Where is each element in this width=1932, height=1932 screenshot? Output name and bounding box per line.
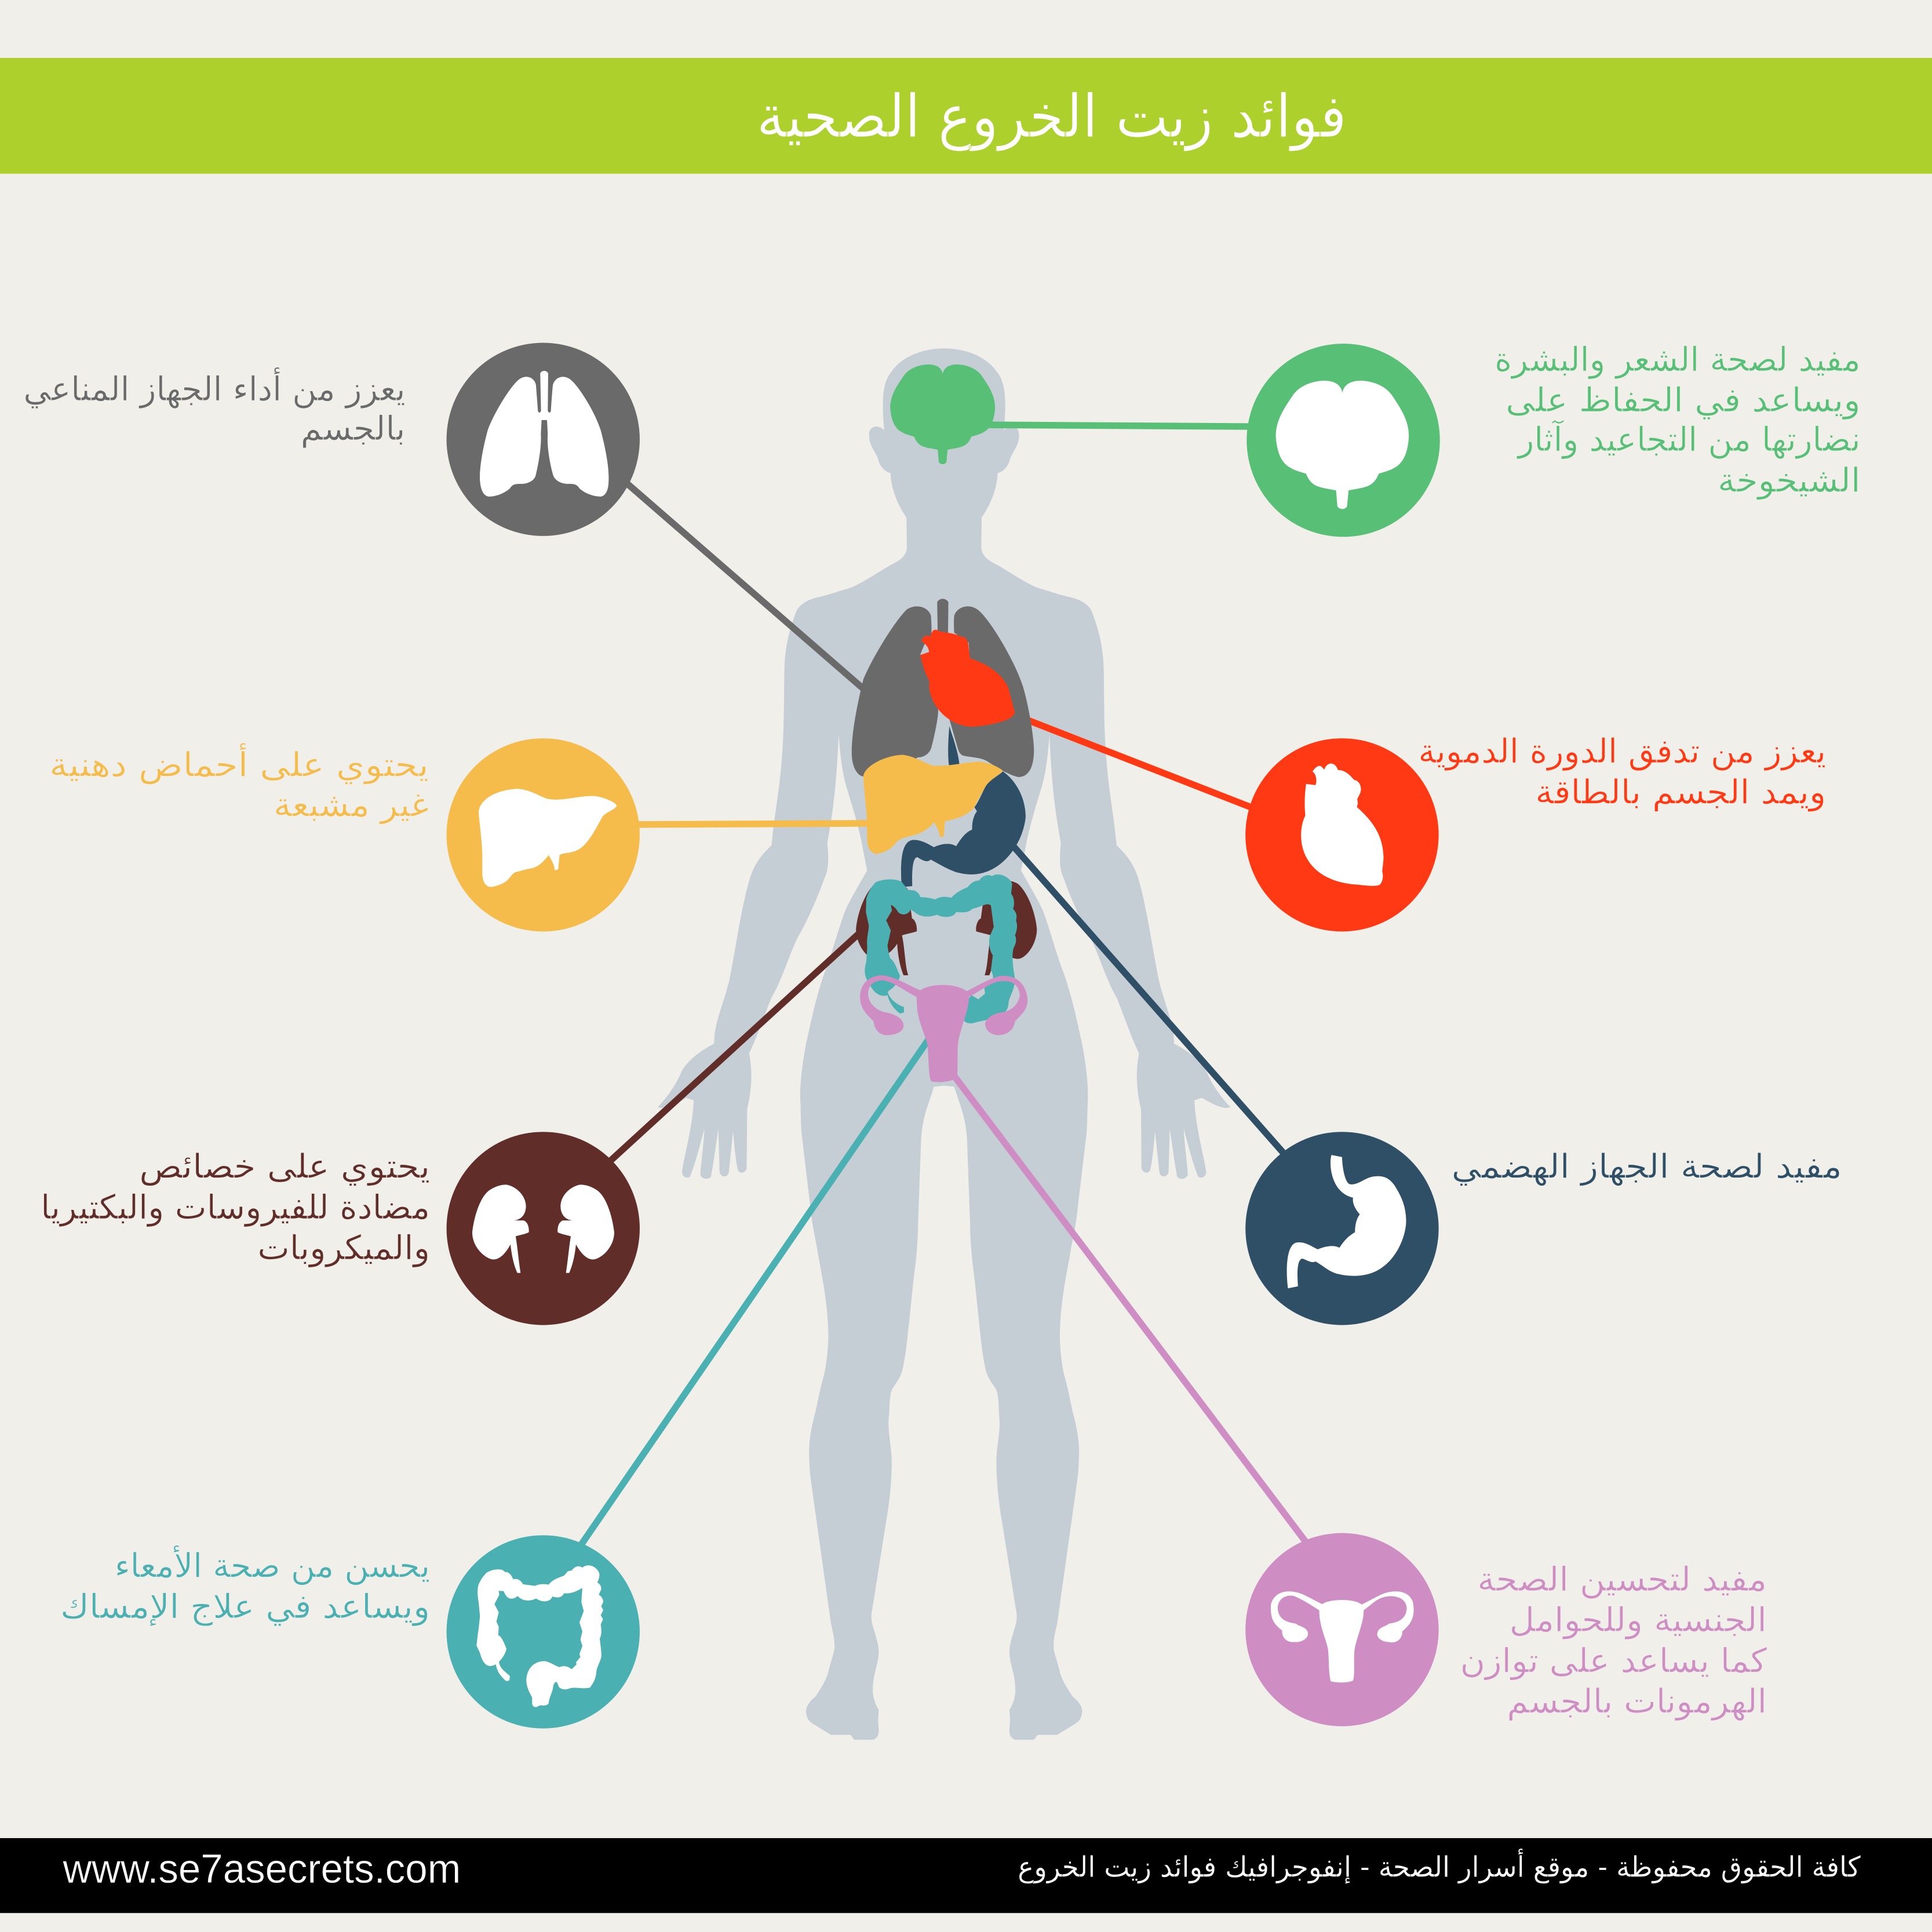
connector: brain — [986, 425, 1257, 427]
organ: liver — [863, 754, 1003, 854]
panel: brain benefit — [1246, 340, 1861, 537]
text: brain benefit: الشيخوخة — [1718, 461, 1861, 500]
text: kidneys benefit — [41, 1147, 430, 1268]
icon: lungs — [447, 343, 640, 536]
text: heart benefit — [1418, 732, 1826, 812]
icon: uterus — [1245, 1533, 1439, 1726]
icon: kidneys — [447, 1132, 640, 1325]
icon: stomach — [1245, 1132, 1439, 1325]
text: intestines benefit: يحسن من صحة الأمعاء — [115, 1545, 430, 1585]
text: kidneys benefit: مضادة للفيروسات والبكتيريا — [41, 1188, 430, 1227]
text: brain benefit: مفيد لصحة الشعر والبشرة — [1494, 340, 1861, 380]
text: brain benefit: نضارتها من التجاعيد وآثار — [1517, 420, 1861, 460]
connector: kidneys — [604, 930, 862, 1167]
panel: uterus benefit — [1245, 1533, 1767, 1726]
text: uterus benefit: الجنسية وللحوامل — [1510, 1601, 1767, 1640]
text: kidneys benefit: يحتوي على خصائص — [139, 1147, 430, 1186]
text: lungs benefit: يعزز من أداء الجهاز المناعي — [23, 367, 406, 409]
text: liver benefit: غير مشبعة — [274, 786, 429, 825]
text: uterus benefit: مفيد لتحسين الصحة — [1477, 1560, 1767, 1599]
text: uterus benefit: الهرمونات بالجسم — [1507, 1682, 1767, 1721]
organ: brain — [890, 364, 995, 464]
organ: esophagus — [948, 726, 960, 765]
text: kidneys benefit: والميكروبات — [257, 1229, 430, 1268]
panel: intestines benefit — [60, 1535, 640, 1729]
human body silhouette — [658, 348, 1230, 1740]
text: intestines benefit: ويساعد في علاج الإمساك — [60, 1587, 430, 1627]
text: brain benefit: ويساعد في الحفاظ على — [1505, 381, 1861, 420]
icon: brain — [1246, 344, 1440, 537]
text: stomach benefit: مفيد لصحة الجهاز الهضمي — [1452, 1147, 1842, 1186]
panel: lungs benefit — [23, 343, 640, 536]
organ: colon — [865, 874, 1017, 1023]
icon: heart — [1245, 738, 1439, 931]
text: brain benefit — [1494, 340, 1861, 500]
organ: heart — [920, 630, 1015, 727]
connector: heart — [1004, 711, 1257, 810]
panel: stomach benefit — [1245, 1132, 1842, 1325]
organ: kidneys — [856, 880, 1037, 975]
text: intestines benefit — [60, 1545, 430, 1627]
organ: uterus — [860, 975, 1027, 1082]
organs inside the body — [852, 364, 1037, 1082]
organ: stomach — [901, 771, 1026, 887]
icon: intestines — [447, 1535, 640, 1729]
website url: www.se7asecrets.com — [62, 1846, 461, 1891]
connector: stomach — [1011, 843, 1291, 1162]
connector: uterus — [951, 1072, 1311, 1549]
panel: kidneys benefit — [41, 1132, 640, 1325]
title banner — [0, 58, 1932, 174]
text: lungs benefit: بالجسم — [301, 409, 406, 448]
connector: lungs — [622, 479, 866, 691]
connector: liver — [635, 823, 875, 825]
footer bar — [0, 1838, 1932, 1913]
text: lungs benefit — [23, 367, 406, 448]
title: فوائد زيت الخروع الصحية — [757, 82, 1347, 151]
organ: lungs — [852, 599, 1034, 777]
connector: intestines — [577, 1035, 931, 1551]
panel: liver benefit — [49, 738, 640, 931]
panel: heart benefit — [1245, 732, 1826, 931]
text: liver benefit: يحتوي على أحماض دهنية — [49, 743, 429, 785]
icon: liver — [447, 738, 640, 931]
text: heart benefit: ويمد الجسم بالطاقة — [1535, 772, 1826, 812]
text: uterus benefit — [1460, 1560, 1767, 1721]
text: heart benefit: يعزز من تدفق الدورة الدموية — [1418, 732, 1826, 771]
copyright: كافة الحقوق محفوظة - موقع أسرار الصحة - إنفوجرافيك فوائد زيت الخروع — [1018, 1848, 1861, 1884]
text: uterus benefit: كما يساعد على توازن — [1460, 1641, 1767, 1680]
text: liver benefit — [49, 743, 429, 825]
